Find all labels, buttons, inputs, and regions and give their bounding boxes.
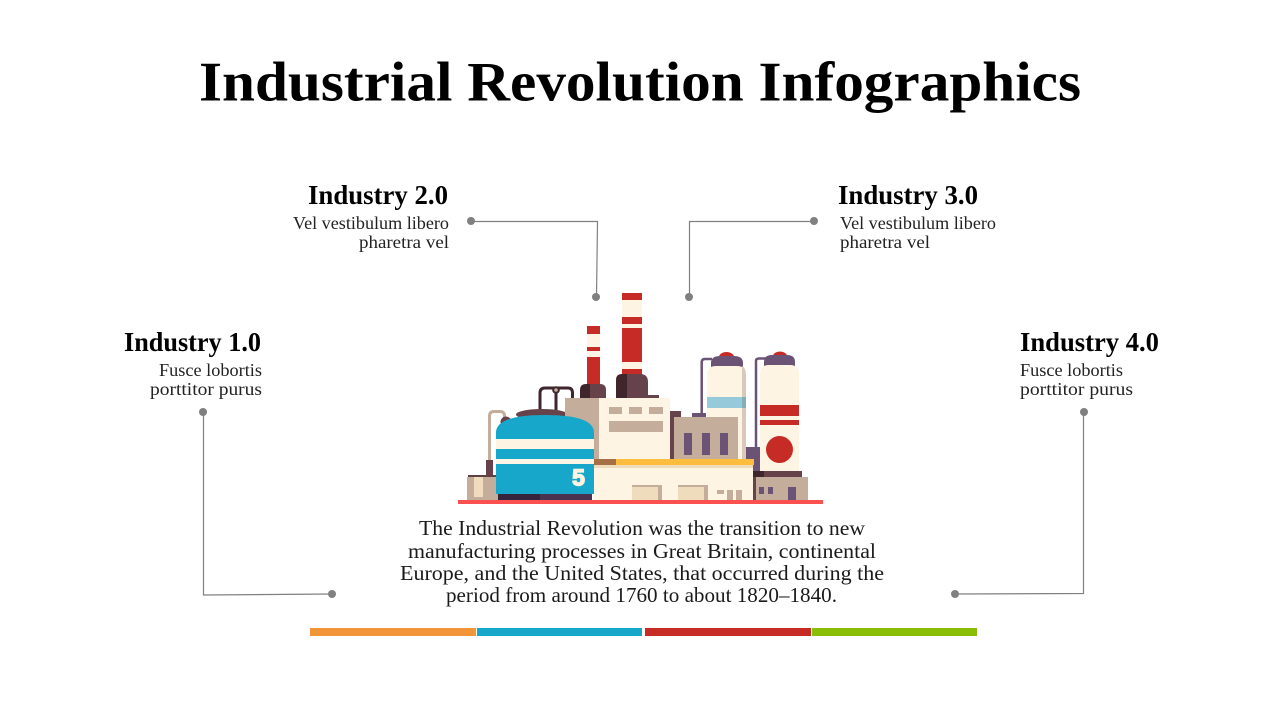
text block: Industry 2.0: Industry 2.0 — [308, 180, 448, 210]
small right building — [753, 471, 808, 500]
small chimney — [580, 326, 606, 398]
text block: Industry 3.0: Vel vestibulum libero — [840, 213, 996, 233]
middle building — [670, 411, 738, 460]
tan pipe — [490, 412, 504, 460]
text block: Industry 2.0: pharetra vel — [359, 232, 449, 252]
text block: Industry 1.0: porttitor purus — [150, 379, 262, 399]
low cream building — [594, 459, 754, 500]
description paragraph — [400, 516, 884, 607]
left cream silo — [702, 352, 746, 460]
text block: Industry 4.0: porttitor purus — [1020, 379, 1133, 399]
ground line — [458, 500, 823, 504]
text block: Industry 3.0: pharetra vel — [840, 232, 930, 252]
purple pipe and block — [746, 358, 766, 472]
description paragraph: period from around 1760 to about 1820–1840. — [446, 583, 837, 607]
tank fittings — [500, 386, 572, 428]
text block: Industry 4.0: Fusce lobortis — [1020, 360, 1123, 380]
blue tank: 5 — [572, 464, 585, 490]
text block: Industry 2.0: Vel vestibulum libero — [293, 213, 449, 233]
text block: Industry 1.0: Fusce lobortis — [159, 360, 262, 380]
description paragraph: manufacturing processes in Great Britain, continental — [408, 539, 876, 563]
connector: Industry 1.0 — [199, 408, 336, 598]
illustration: factory — [458, 293, 823, 504]
tall chimney — [616, 293, 648, 398]
text block: Industry 1.0: Industry 1.0 — [124, 327, 261, 357]
small left building — [467, 460, 498, 500]
colour bar — [310, 628, 977, 636]
connector: Industry 3.0 — [685, 217, 818, 301]
text block: Industry 4.0 — [1020, 327, 1159, 399]
connector: Industry 2.0 — [467, 217, 600, 301]
description paragraph: The Industrial Revolution was the transition to new — [419, 516, 865, 540]
text block: Industry 3.0 — [838, 180, 996, 252]
text block: Industry 3.0: Industry 3.0 — [838, 180, 978, 210]
description paragraph: Europe, and the United States, that occurred during the — [400, 561, 884, 585]
text block: Industry 1.0 — [124, 327, 262, 399]
text block: Industry 2.0 — [293, 180, 449, 252]
text block: Industry 4.0: Industry 4.0 — [1020, 327, 1159, 357]
connector: Industry 4.0 — [951, 408, 1088, 598]
right cream silo — [760, 352, 799, 472]
blue tank — [496, 415, 594, 500]
title: Industrial Revolution Infographics — [199, 52, 1081, 114]
beige building with windows — [565, 395, 670, 459]
